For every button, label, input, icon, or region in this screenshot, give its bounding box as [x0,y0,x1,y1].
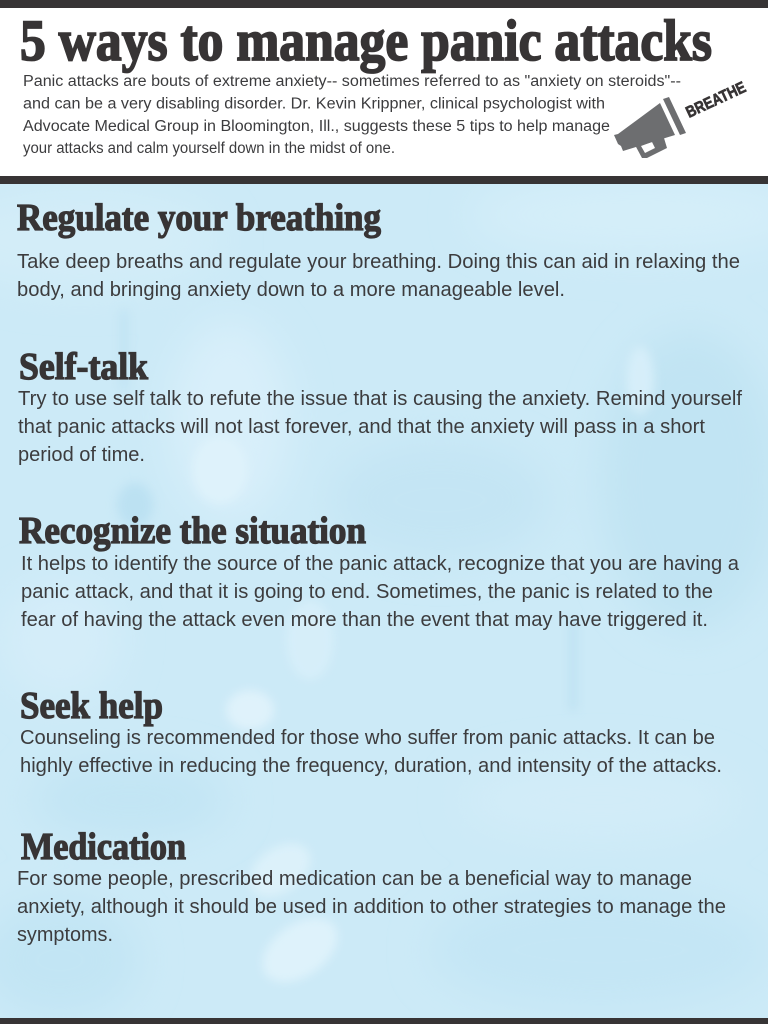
section: recognize the situation [19,510,740,631]
body: regulate your breathing: Take deep breaths and regulate your breathing. Doing this can aid in relaxing the [17,251,740,273]
body: medication: symptoms. [17,924,113,946]
body: regulate your breathing [17,251,740,301]
heading: recognize the situation: Recognize the situation [19,510,366,552]
section: seek help [20,685,722,777]
body: recognize the situation [21,553,740,631]
heading: medication: Medication [21,826,186,868]
body: medication [17,868,726,946]
intro text: Panic attacks are bouts of extreme anxiety-- sometimes referred to as "anxiety on steroids"-- [23,73,681,90]
body: seek help: highly effective in reducing the frequency, duration, and intensity of the attacks. [20,755,722,777]
body: self-talk: Try to use self talk to refute the issue that is causing the anxiety. Remind yourself [18,388,742,410]
intro text: your attacks and calm yourself down in the midst of one. [23,140,395,157]
intro text: Advocate Medical Group in Bloomington, Ill., suggests these 5 tips to help manage [23,118,610,135]
top bar [0,0,768,8]
body: medication: For some people, prescribed medication can be a beneficial way to manage [17,868,692,890]
header divider bar [0,176,768,184]
heading: regulate your breathing: Regulate your breathing [17,197,381,239]
body: seek help: Counseling is recommended for those who suffer from panic attacks. It can be [20,727,715,749]
body: self-talk: that panic attacks will not last forever, and that the anxiety will pass in a short [18,416,705,438]
section: medication [17,826,726,946]
icon: megaphone [614,97,686,158]
intro text [23,73,681,157]
icon label: breathe: BREATHE [684,79,749,122]
body: seek help [20,727,722,777]
body: recognize the situation: fear of having the attack even more than the event that may have triggered it. [21,609,708,631]
body: self-talk [18,388,742,466]
body: recognize the situation: It helps to identify the source of the panic attack, recognize that you are having a [21,553,740,575]
body: recognize the situation: panic attack, and that it is going to end. Sometimes, the panic is related to the [21,581,713,603]
section: regulate your breathing [17,197,740,301]
body: self-talk: period of time. [18,444,145,466]
section: self-talk [18,346,742,466]
body: medication: anxiety, although it should be used in addition to other strategies to manage the [17,896,726,918]
heading: seek help: Seek help [20,685,163,727]
bottom bar [0,1018,768,1024]
intro text: and can be a very disabling disorder. Dr. Kevin Krippner, clinical psychologist with [23,96,605,112]
heading: self-talk: Self-talk [19,346,149,388]
body: regulate your breathing: body, and bringing anxiety down to a more manageable level. [17,279,565,301]
